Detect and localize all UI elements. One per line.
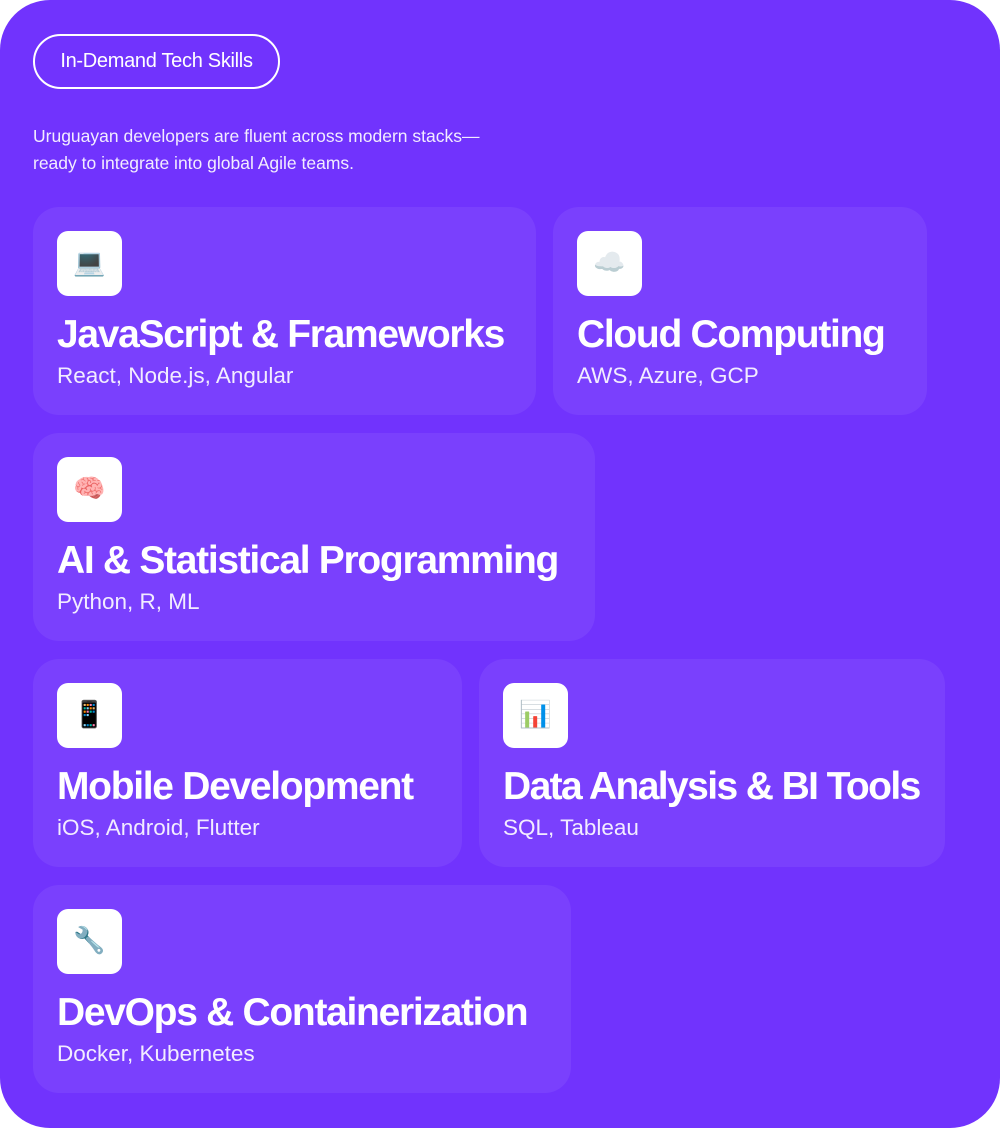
card: JavaScript (33, 207, 536, 415)
description text: Uruguayan developers are fluent across modern stacks— (33, 126, 479, 146)
icon: chart: 📊 (519, 700, 552, 730)
card title: Cloud Computing (577, 313, 885, 356)
card: DevOps (33, 885, 571, 1093)
card subtitle: SQL, Tableau (503, 815, 639, 840)
icon: brain (57, 457, 122, 522)
card subtitle: Docker, Kubernetes (57, 1041, 255, 1066)
card: Cloud (553, 207, 927, 415)
card title: Mobile Development (57, 765, 413, 808)
card title: DevOps & Containerization (57, 991, 527, 1034)
icon: chart (503, 683, 568, 748)
icon: cloud (577, 231, 642, 296)
card: Mobile (33, 659, 462, 867)
icon: cloud: ☁️ (593, 248, 626, 278)
card title: JavaScript & Frameworks (57, 313, 504, 356)
icon: phone: 📱 (73, 700, 106, 730)
description text (33, 126, 480, 173)
description text: ready to integrate into global Agile teams. (33, 153, 354, 173)
icon: brain: 🧠 (73, 474, 106, 504)
card subtitle: iOS, Android, Flutter (57, 815, 260, 840)
icon: laptop (57, 231, 122, 296)
card title: AI & Statistical Programming (57, 539, 558, 582)
icon: phone (57, 683, 122, 748)
icon: laptop: 💻 (73, 248, 106, 278)
title pill (33, 34, 280, 89)
icon: wrench (57, 909, 122, 974)
card subtitle: Python, R, ML (57, 589, 200, 614)
card: Data (479, 659, 945, 867)
card subtitle: React, Node.js, Angular (57, 363, 293, 388)
card title: Data Analysis & BI Tools (503, 765, 920, 808)
card subtitle: AWS, Azure, GCP (577, 363, 759, 388)
icon: wrench: 🔧 (73, 926, 106, 956)
card: AI (33, 433, 595, 641)
title pill: In-Demand Tech Skills (60, 50, 253, 72)
